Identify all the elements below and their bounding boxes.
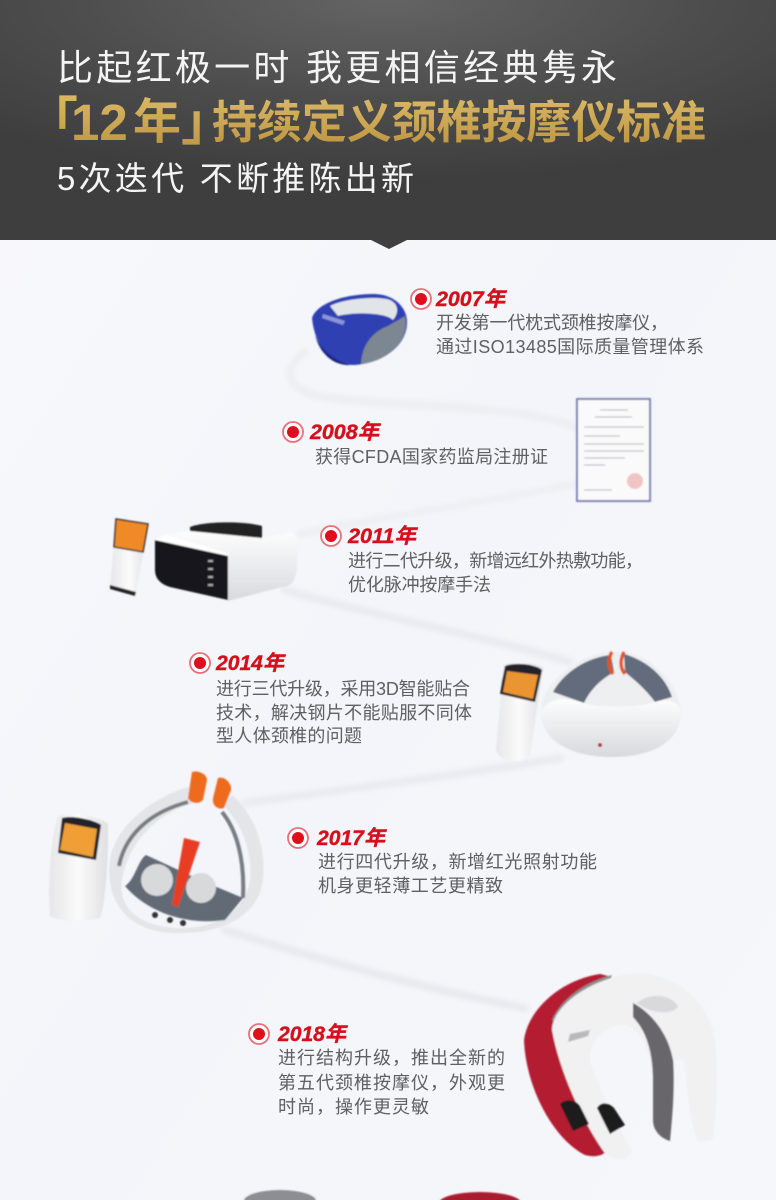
description xyxy=(278,1048,505,1117)
description: 技术，解决钢片不能贴服不同体 xyxy=(216,703,472,723)
bullet xyxy=(411,289,431,309)
description xyxy=(348,551,643,595)
year: 2011年 xyxy=(347,525,418,548)
bullet xyxy=(321,526,341,546)
description: 进行三代升级，采用3D智能贴合 xyxy=(216,679,470,699)
header notch arrow xyxy=(371,240,407,249)
description: 进行结构升级，推出全新的 xyxy=(278,1048,505,1068)
description: 进行二代升级，新增远红外热敷功能， xyxy=(348,551,643,571)
icon: fifth generation red and white devices xyxy=(524,973,717,1159)
headline line 1: 比起红极一时 我更相信经典隽永 xyxy=(57,47,617,88)
icon: third generation device and remote xyxy=(496,652,681,761)
icon: second generation device and remote xyxy=(110,519,297,601)
milestone 2018 xyxy=(249,973,717,1159)
milestone 2008 xyxy=(283,399,650,501)
year: 2018年 xyxy=(277,1023,348,1046)
year: 2008年 xyxy=(309,421,381,444)
headline line 2 gold: 年 xyxy=(133,96,181,149)
headline line 2 gold: 持续定义颈椎按摩仪标准 xyxy=(212,97,706,148)
cropped next products at bottom edge xyxy=(244,1190,521,1200)
milestone 2014 xyxy=(190,652,681,761)
bullet xyxy=(190,653,210,673)
headline line 2 gold: 12 xyxy=(71,94,128,151)
description: 型人体颈椎的问题 xyxy=(216,726,362,746)
headline line 2 gold: 「 xyxy=(26,94,78,152)
year: 2017年 xyxy=(316,827,387,850)
milestone 2011 xyxy=(110,519,643,601)
bullet xyxy=(288,828,308,848)
description: 通过ISO13485国际质量管理体系 xyxy=(436,337,704,357)
description: 开发第一代枕式颈椎按摩仪， xyxy=(436,313,668,333)
description xyxy=(436,313,704,357)
headline line 3: 5次迭代 不断推陈出新 xyxy=(57,160,414,197)
milestone 2017 xyxy=(49,771,597,933)
headline line 2 gold: 」 xyxy=(181,94,233,152)
connecting ribbon xyxy=(225,352,580,1008)
headline line 2 gold xyxy=(26,94,706,152)
bullet xyxy=(249,1024,269,1044)
description xyxy=(318,852,597,896)
description xyxy=(216,679,472,746)
year: 2014年 xyxy=(215,652,286,675)
description: 优化脉冲按摩手法 xyxy=(348,575,491,595)
description: 机身更轻薄工艺更精致 xyxy=(318,876,503,896)
description: 获得CFDA国家药监局注册证 xyxy=(315,447,548,467)
description: 第五代颈椎按摩仪，外观更 xyxy=(278,1073,505,1093)
bullet xyxy=(283,422,303,442)
description: 时尚，操作更灵敏 xyxy=(278,1097,429,1117)
icon: certificate xyxy=(577,399,650,501)
header band xyxy=(0,0,776,249)
milestone 2007 xyxy=(312,288,704,365)
description: 进行四代升级，新增红光照射功能 xyxy=(318,852,597,872)
icon: blue pillow massager xyxy=(312,294,407,365)
icon: fourth generation device and remote xyxy=(49,771,263,933)
year: 2007年 xyxy=(435,288,507,311)
